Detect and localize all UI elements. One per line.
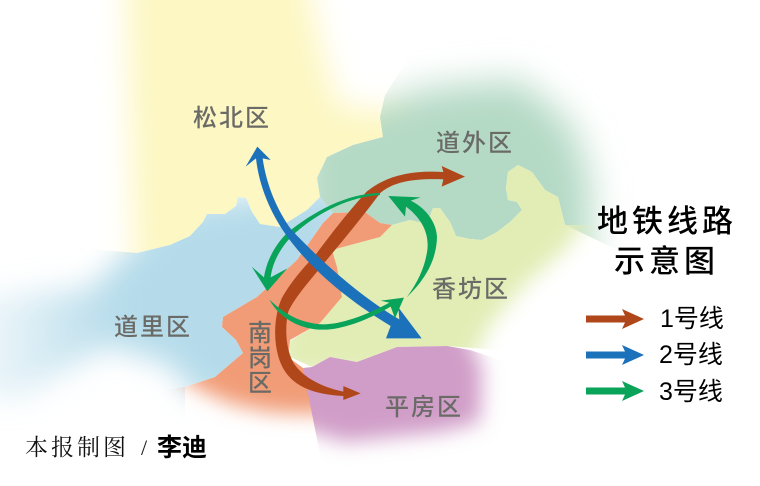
metro line 3 arrow: lower arc: [269, 298, 404, 330]
credit: [25, 434, 207, 462]
map regions: [0, 0, 590, 442]
region: Daowai green: [317, 61, 612, 246]
label: Songbei: 松北区: [193, 105, 271, 132]
label: Pingfang: 平房区: [385, 394, 463, 421]
metro line 1 arrow: [275, 166, 465, 400]
credit: 本报制图: [25, 435, 129, 460]
label: Xiangfang: 香坊区: [432, 276, 510, 303]
metro line 3 arrow: upper arc: [252, 193, 380, 291]
legend: [586, 305, 724, 406]
heading: metro line map: [597, 204, 737, 279]
region: Pingfang purple: [303, 346, 495, 454]
label: Nangang vertical: 南: [248, 320, 274, 347]
label: Nangang vertical: 区: [248, 370, 274, 397]
legend item: line 2: 2号线: [659, 341, 723, 369]
heading: metro line map: 示意图: [614, 244, 719, 279]
label: Nangang vertical: [248, 320, 274, 397]
metro line 2 arrow: [246, 147, 422, 338]
legend item: line 3: 3号线: [659, 378, 723, 406]
region: Nangang salmon: [174, 212, 392, 428]
metro line 3 arrow: right arc: [388, 196, 437, 297]
label: Nangang vertical: 岗: [248, 345, 274, 372]
label: Daowai: 道外区: [436, 130, 514, 157]
region: Xiangfang pale green: [289, 165, 591, 367]
credit: 李迪: [157, 434, 207, 462]
label: Daoli: 道里区: [114, 314, 192, 341]
region: Songbei yellow: [110, 0, 393, 255]
heading: metro line map: 地铁线路: [597, 204, 737, 239]
legend item: line 1: 1号线: [660, 305, 724, 333]
credit: /: [141, 435, 148, 460]
region: Daoli blue: [0, 197, 333, 406]
